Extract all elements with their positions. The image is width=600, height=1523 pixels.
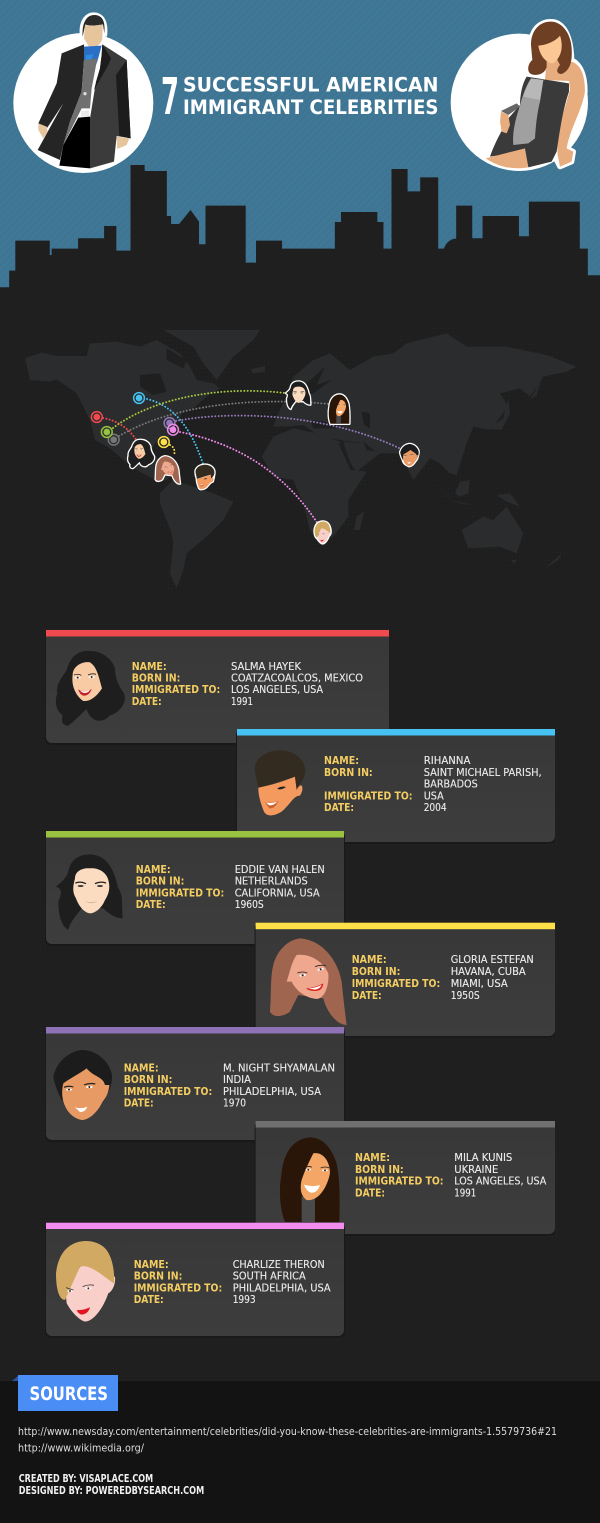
panel: Salma Hayek: IMMIGRATED TO:	[132, 685, 220, 696]
panel: Salma Hayek: COATZACOALCOS, MEXICO	[231, 674, 363, 684]
illustration: woman in dress	[451, 22, 588, 171]
panel: Charlize Theron: PHILADELPHIA, USA	[233, 1284, 331, 1294]
panel: Mila Kunis: LOS ANGELES, USA	[454, 1176, 546, 1188]
title: IMMIGRANT CELEBRITIES	[183, 96, 438, 119]
panel: Eddie Van Halen: 1960S	[235, 900, 264, 911]
panel: Gloria Estefan	[255, 923, 555, 1038]
panel: Gloria Estefan: 1950S	[451, 991, 480, 1002]
panel: Rihanna	[236, 729, 555, 844]
panel: Eddie Van Halen: CALIFORNIA, USA	[235, 888, 320, 900]
panel: Salma Hayek	[45, 630, 389, 745]
panel: Gloria Estefan: BORN IN:	[352, 967, 400, 978]
landmasses: Americas and Greenland	[25, 330, 265, 588]
panel: M. Night Shyamalan: NAME:	[124, 1064, 159, 1074]
panel: M. Night Shyamalan: INDIA	[223, 1075, 251, 1086]
portrait: Mila Kunis	[280, 1137, 340, 1222]
footer background	[0, 1381, 600, 1523]
header sky background	[0, 0, 600, 320]
panel: M. Night Shyamalan: M. NIGHT SHYAMALAN	[223, 1064, 335, 1074]
portrait: M. Night Shyamalan	[53, 1050, 112, 1120]
credits	[19, 1474, 204, 1497]
panel: Gloria Estefan: GLORIA ESTEFAN	[451, 955, 534, 966]
source links	[18, 1425, 557, 1455]
city skyline silhouette	[0, 165, 600, 320]
panel: Charlize Theron: BORN IN:	[134, 1272, 182, 1282]
portrait: Eddie Van Halen	[56, 854, 123, 930]
panel: Eddie Van Halen: NAME:	[136, 865, 171, 876]
landmasses: Africa, Eurasia, Oceania	[262, 333, 577, 568]
panel: Charlize Theron: 1993	[233, 1295, 256, 1306]
portrait: Gloria Estefan	[270, 938, 347, 1025]
panel: Mila Kunis: NAME:	[355, 1153, 390, 1164]
panel: M. Night Shyamalan: 1970	[223, 1098, 246, 1110]
panel: Gloria Estefan: IMMIGRATED TO:	[352, 979, 440, 990]
panel: Salma Hayek: 1991	[231, 697, 253, 708]
credits: DESIGNED BY: POWEREDBYSEARCH.COM	[19, 1486, 204, 1497]
title: 7	[161, 68, 179, 127]
credits: CREATED BY: VISAPLACE.COM	[19, 1474, 153, 1485]
illustration: man in suit	[13, 12, 153, 173]
map face: Gloria Estefan	[156, 456, 180, 484]
title: SUCCESSFUL AMERICAN	[183, 74, 438, 97]
panel: Rihanna: NAME:	[324, 756, 359, 767]
panel: Rihanna: BORN IN:	[324, 768, 373, 779]
map face: Charlize Theron	[315, 522, 331, 543]
panel: Charlize Theron: CHARLIZE THERON	[233, 1260, 325, 1271]
panel: Mila Kunis: BORN IN:	[355, 1165, 404, 1176]
sources heading tab	[12, 1375, 118, 1411]
panel: Charlize Theron: NAME:	[134, 1260, 169, 1271]
portrait: Salma Hayek	[56, 651, 125, 726]
panel: Gloria Estefan: HAVANA, CUBA	[451, 967, 526, 978]
panel: M. Night Shyamalan: DATE:	[124, 1098, 154, 1110]
map face: Salma Hayek	[128, 440, 154, 468]
panel: Mila Kunis: DATE:	[355, 1188, 385, 1200]
panel: Salma Hayek: DATE:	[132, 697, 162, 708]
panel: M. Night Shyamalan: PHILADELPHIA, USA	[223, 1087, 321, 1098]
portrait: Charlize Theron	[56, 1241, 115, 1322]
panel: Charlize Theron	[45, 1223, 345, 1338]
map face: Mila Kunis	[329, 394, 349, 424]
panel: Charlize Theron: DATE:	[134, 1295, 164, 1306]
panel: Rihanna: RIHANNA	[424, 756, 470, 767]
world map	[25, 330, 577, 588]
panel: Eddie Van Halen: IMMIGRATED TO:	[136, 888, 224, 900]
source links: http://www.wikimedia.org/	[18, 1442, 144, 1455]
panel: Salma Hayek: BORN IN:	[132, 674, 180, 684]
panel: Rihanna: USA	[424, 791, 444, 802]
migration route arcs	[103, 391, 401, 524]
title	[161, 68, 438, 127]
sources heading tab: SOURCES	[30, 1384, 108, 1405]
panel: Eddie Van Halen: NETHERLANDS	[235, 876, 308, 888]
map face: Rihanna	[196, 465, 214, 489]
panel: Mila Kunis: IMMIGRATED TO:	[355, 1176, 444, 1188]
map face: M. Night Shyamalan	[400, 444, 419, 466]
map origin markers	[91, 393, 178, 447]
panel: Mila Kunis: MILA KUNIS	[454, 1153, 512, 1164]
panel: M. Night Shyamalan	[45, 1027, 345, 1142]
panel: Gloria Estefan: DATE:	[352, 991, 382, 1002]
panel: Gloria Estefan: NAME:	[352, 955, 387, 966]
panel: M. Night Shyamalan: IMMIGRATED TO:	[124, 1087, 212, 1098]
panel: Eddie Van Halen	[45, 831, 345, 946]
panel: Mila Kunis	[255, 1121, 555, 1236]
panel: Charlize Theron: SOUTH AFRICA	[233, 1272, 306, 1282]
panel: Salma Hayek: NAME:	[132, 662, 167, 673]
panel: Eddie Van Halen: BORN IN:	[136, 876, 184, 888]
map face: Eddie Van Halen	[286, 382, 310, 409]
panel: Rihanna: 2004	[424, 803, 447, 814]
panel: Eddie Van Halen: EDDIE VAN HALEN	[235, 865, 325, 876]
panel: Rihanna: IMMIGRATED TO:	[324, 791, 412, 802]
portrait: Rihanna	[255, 750, 305, 815]
panel: Rihanna: DATE:	[324, 803, 354, 814]
panel: Mila Kunis: 1991	[454, 1188, 476, 1200]
panel: Rihanna: SAINT MICHAEL PARISH,	[424, 768, 542, 779]
panel: Salma Hayek: LOS ANGELES, USA	[231, 685, 323, 696]
panel: M. Night Shyamalan: BORN IN:	[124, 1075, 172, 1086]
panel: Mila Kunis: UKRAINE	[454, 1165, 498, 1176]
panel: Salma Hayek: SALMA HAYEK	[231, 662, 301, 673]
panel: Charlize Theron: IMMIGRATED TO:	[134, 1284, 222, 1294]
panel: Gloria Estefan: MIAMI, USA	[451, 979, 508, 990]
panel: Eddie Van Halen: DATE:	[136, 900, 166, 911]
panel: Rihanna: BARBADOS	[424, 780, 478, 790]
dark page background	[0, 300, 600, 1400]
